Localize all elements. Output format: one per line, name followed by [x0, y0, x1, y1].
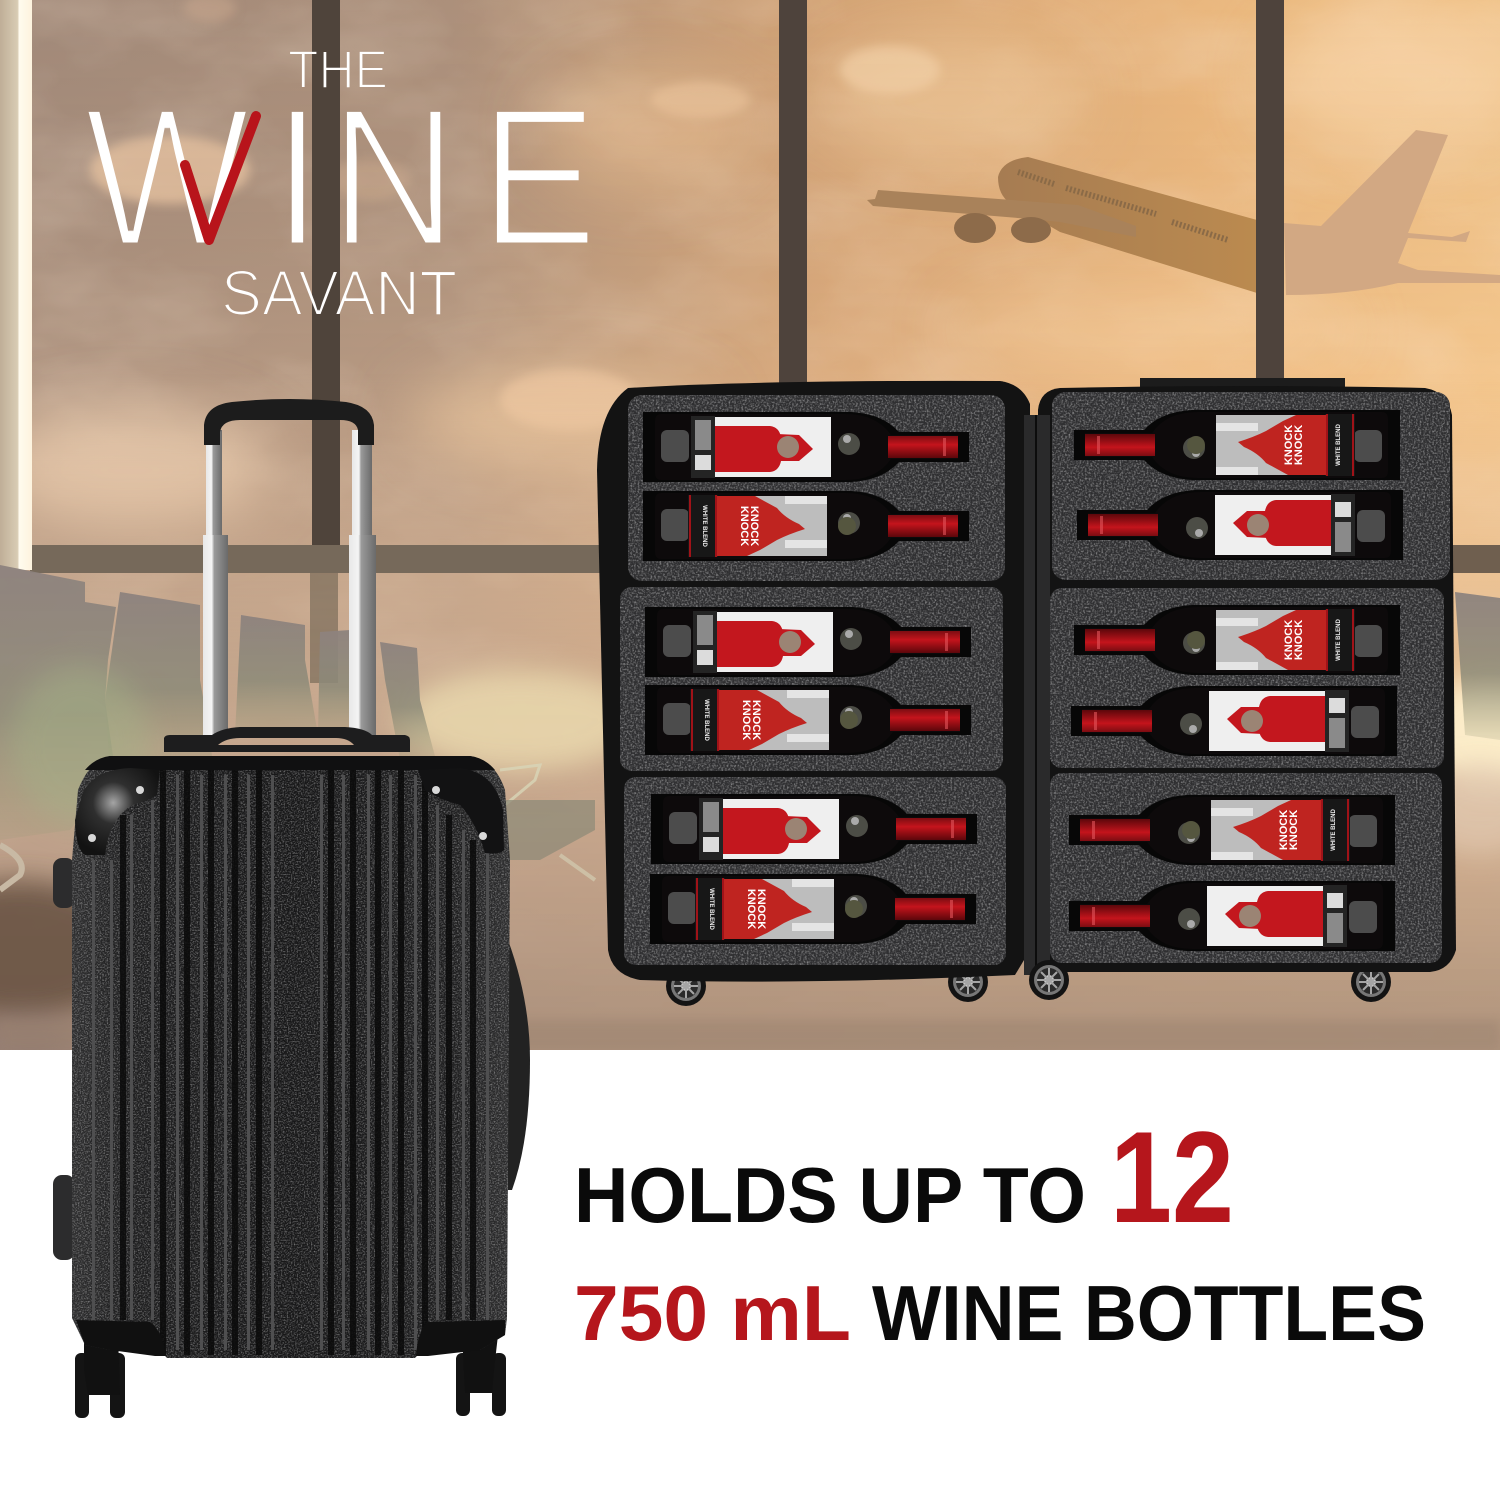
bottle: left 2: KNOCK	[748, 506, 760, 546]
logo word: THE: THE	[288, 40, 388, 100]
bottom corner guards	[76, 1320, 505, 1356]
wheels	[75, 1335, 506, 1418]
center wheel	[1029, 960, 1069, 1000]
small chair behind suitcase	[0, 765, 595, 890]
telescopic handle	[203, 399, 376, 735]
bottle: left 2: WHITE BLEND	[701, 505, 707, 547]
white bottom panel	[0, 1050, 1500, 1500]
big number 12: 12	[1110, 1104, 1234, 1250]
airport window background	[0, 0, 1500, 1050]
headline line 2 red: 750 mL	[574, 1269, 851, 1357]
bottle: left 6: WHITE BLEND	[708, 888, 714, 930]
bottle: right 5: KNOCK	[1288, 810, 1300, 850]
shell ribs	[92, 775, 489, 1350]
bottle: left 3	[645, 607, 971, 677]
top left corner guard	[75, 768, 160, 855]
bottle: right 4	[1071, 686, 1397, 756]
airport seats	[0, 565, 1500, 840]
headline line 2 black: WINE BOTTLES	[872, 1269, 1426, 1357]
bottle: right 5: WHITE BLEND	[1331, 809, 1337, 851]
bottle: right 3: KNOCK	[1293, 620, 1305, 660]
bottle: right 3: KNOCK	[1283, 620, 1295, 660]
bottle: left 4: KNOCK	[740, 700, 752, 740]
bottle: right 3: WHITE BLEND	[1336, 619, 1342, 661]
bottle: right 5: KNOCK	[1278, 810, 1290, 850]
side pocket	[508, 940, 530, 1190]
logo word: SAVANT: SAVANT	[221, 257, 457, 329]
bottle: right 1: KNOCK	[1283, 425, 1295, 465]
closed suitcase	[53, 399, 530, 1418]
top rim	[85, 756, 495, 770]
logo: The Wine Savant	[84, 40, 597, 329]
carry handle	[164, 727, 410, 752]
window frame bars	[30, 0, 1500, 683]
headline	[574, 1104, 1426, 1357]
bottle: left 6: KNOCK	[755, 889, 767, 929]
cabin windows	[1018, 172, 1228, 240]
headline line 1: HOLDS UP TO	[574, 1151, 1086, 1239]
far tail section	[1284, 130, 1500, 295]
bottle: left 5	[651, 794, 977, 864]
open wine case	[597, 378, 1456, 1000]
shell grooves	[120, 770, 476, 1355]
case shell	[597, 378, 1456, 982]
side locks	[53, 858, 75, 1260]
bottle: right 5	[1069, 795, 1395, 865]
bottle: left 2	[643, 491, 969, 561]
wheels of open case	[666, 962, 1391, 1006]
foam trays	[620, 392, 1450, 965]
bottle: left 4	[645, 685, 971, 755]
bottle: right 6	[1069, 881, 1395, 951]
bottle: left 4: KNOCK	[750, 700, 762, 740]
wing	[867, 190, 1136, 237]
green lens flare	[10, 665, 150, 825]
bottle: left 1	[643, 412, 969, 482]
bottle: left 2: KNOCK	[738, 506, 750, 546]
bottle: left 6: KNOCK	[745, 889, 757, 929]
window pillar	[0, 0, 32, 570]
bottle: right 3	[1074, 605, 1400, 675]
bottle: left 6	[650, 874, 976, 944]
bottle: right 1: KNOCK	[1293, 425, 1305, 465]
fuselage	[998, 157, 1257, 293]
logo word: WINE: WINE	[84, 67, 597, 287]
bottle: right 1	[1074, 410, 1400, 480]
airplane	[867, 130, 1500, 295]
horizon haze and floor	[0, 670, 1500, 1066]
bottle: right 1: WHITE BLEND	[1336, 424, 1342, 466]
bottle: left 4: WHITE BLEND	[703, 699, 709, 741]
engines	[954, 213, 1051, 243]
top right corner guard	[418, 768, 504, 854]
suitcase shell	[72, 756, 510, 1358]
bottle: right 2	[1077, 490, 1403, 560]
